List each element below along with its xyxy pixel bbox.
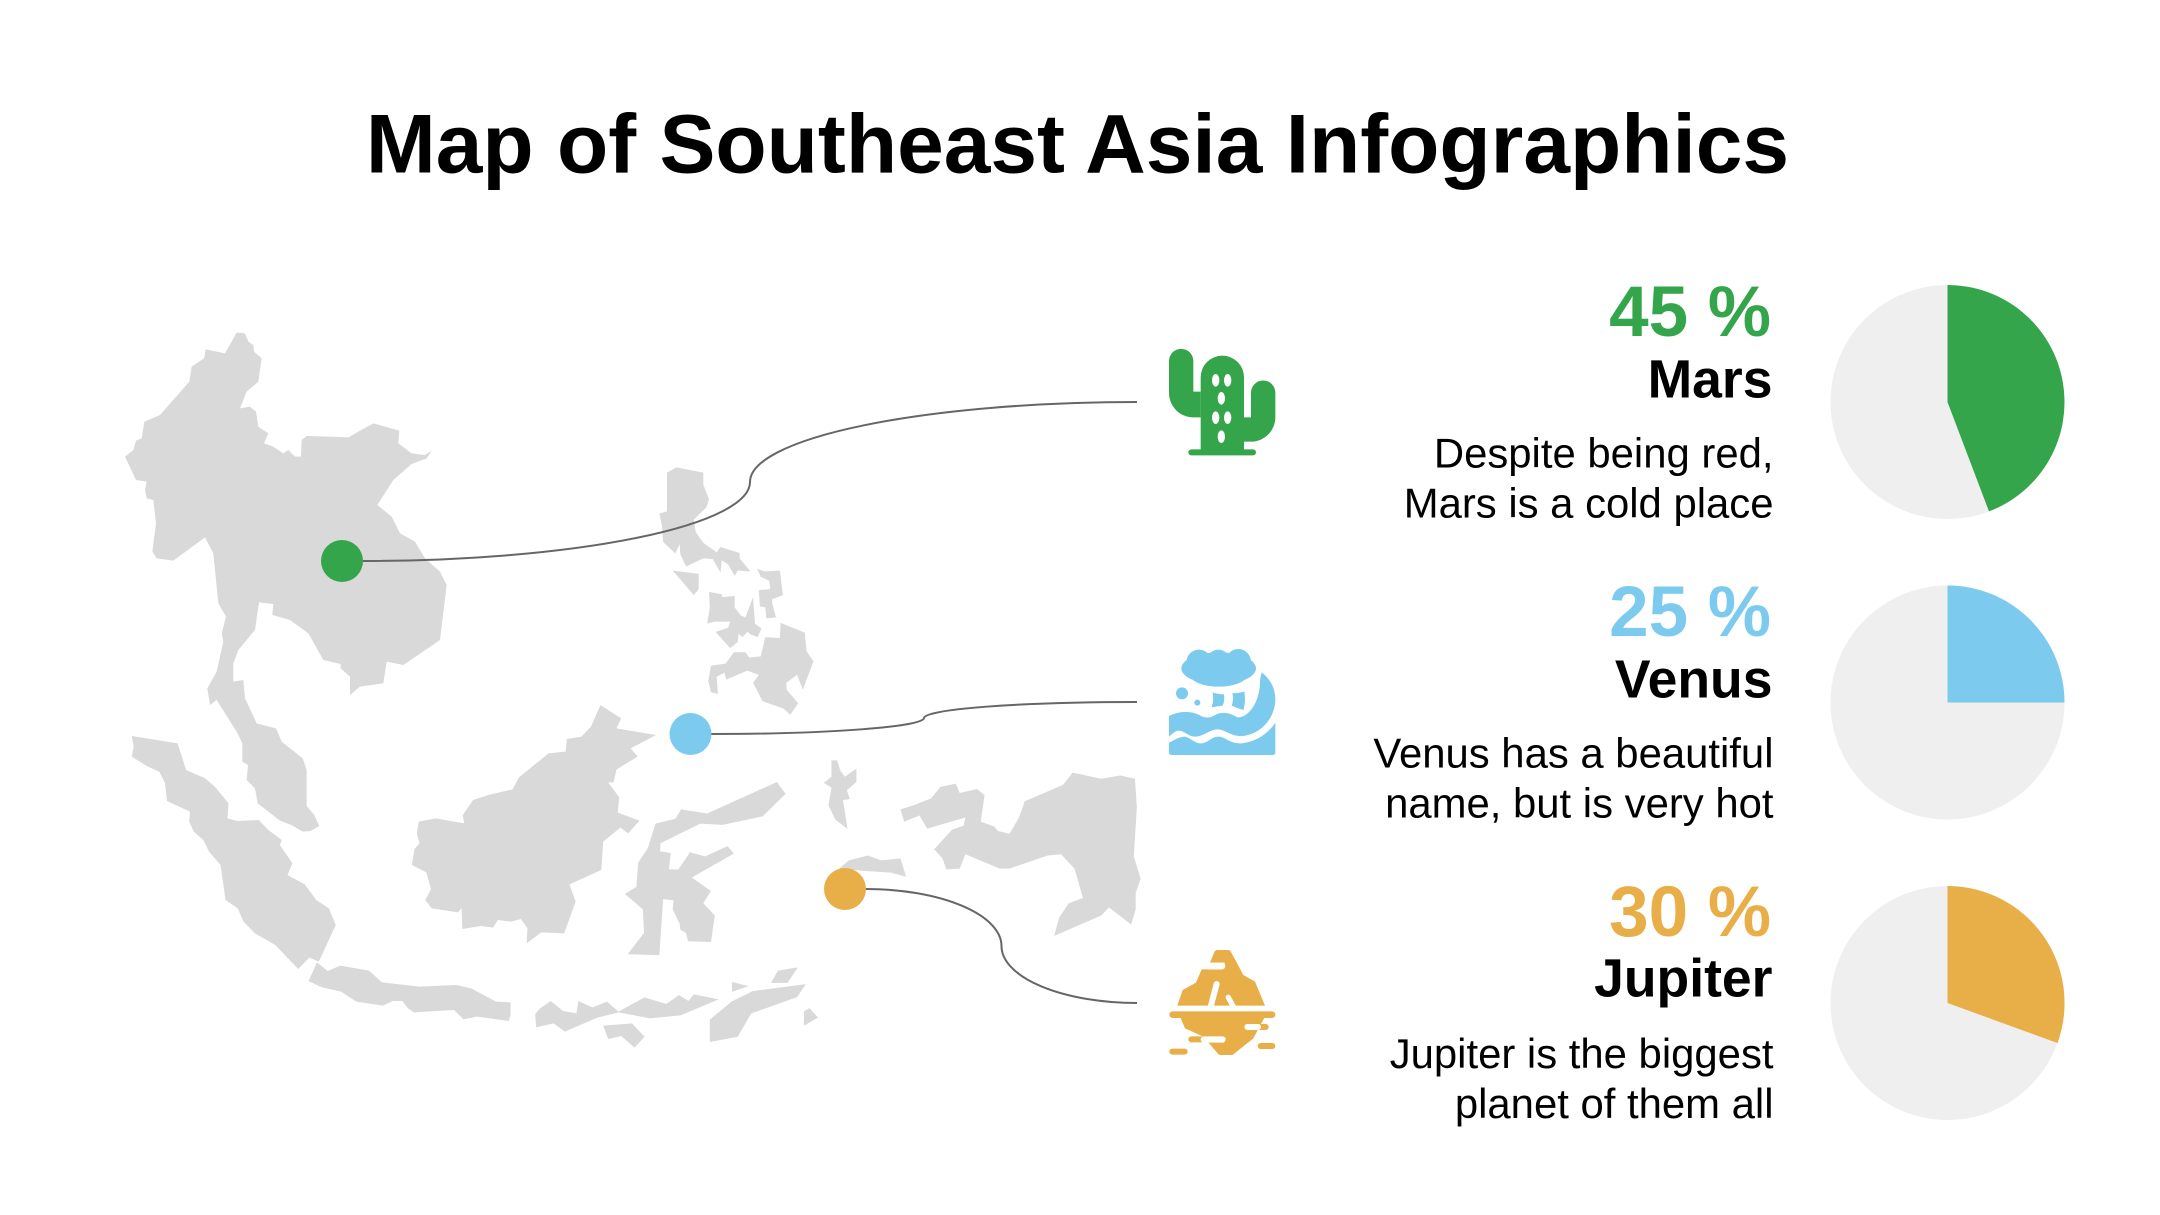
Luzon: [659, 467, 750, 576]
title: Map of Southeast Asia Infographics: [366, 96, 1789, 190]
marker: orange dot: [824, 868, 866, 910]
Sumatra: [132, 736, 336, 969]
small island two: [771, 967, 798, 983]
percentage: 30 %: 30 %: [1609, 873, 1771, 952]
description: Jupiter: Jupiter is the biggest: [1390, 1030, 1774, 1077]
map of Southeast Asia: [125, 333, 1141, 1048]
Sulawesi: [625, 782, 786, 955]
small island one: [732, 982, 748, 992]
connector: orange dot to iceberg: [866, 889, 1137, 1003]
name: Venus: Venus: [1615, 650, 1772, 710]
Borneo: [412, 705, 656, 943]
connector: blue dot to wave: [711, 702, 1137, 734]
connector: green dot to cactus: [363, 402, 1137, 561]
percentage: 25 %: 25 %: [1609, 573, 1771, 652]
description: Venus: name, but is very hot: [1385, 780, 1774, 827]
Visayas: [707, 592, 761, 648]
icon: cactus: [1169, 349, 1275, 455]
Sumba: [603, 1023, 645, 1048]
text block: Jupiter: [1390, 873, 1774, 1127]
icon: iceberg: [1169, 950, 1275, 1055]
Lesser Sunda islands: [535, 994, 719, 1032]
name: Mars: Mars: [1648, 350, 1772, 410]
description: Venus: Venus has a beautiful: [1373, 729, 1774, 776]
Mindanao: [708, 623, 814, 715]
description: Mars: Despite being red,: [1434, 429, 1774, 476]
description: Jupiter: planet of them all: [1455, 1080, 1774, 1127]
pie chart: 45%: [1830, 285, 2065, 519]
pie chart: 25%: [1830, 586, 2064, 820]
name: Jupiter: Jupiter: [1594, 950, 1773, 1008]
Palawan: [673, 571, 699, 595]
Seram: [839, 856, 906, 877]
marker: blue dot: [670, 713, 712, 755]
small island three: [804, 1008, 818, 1026]
Halmahera: [824, 760, 856, 829]
mainland Southeast Asia: [125, 333, 447, 832]
pie chart: 30%: [1830, 886, 2065, 1120]
icon: tidal wave: [1169, 649, 1275, 755]
Timor: [710, 984, 806, 1042]
Java: [309, 962, 511, 1021]
text block: Mars: [1404, 273, 1774, 527]
percentage: 45 %: 45 %: [1609, 273, 1771, 352]
description: Mars: Mars is a cold place: [1404, 480, 1774, 527]
Samar and Leyte: [757, 569, 783, 618]
New Guinea: [900, 773, 1141, 936]
text block: Venus: [1373, 573, 1774, 827]
marker: green dot: [321, 540, 363, 582]
